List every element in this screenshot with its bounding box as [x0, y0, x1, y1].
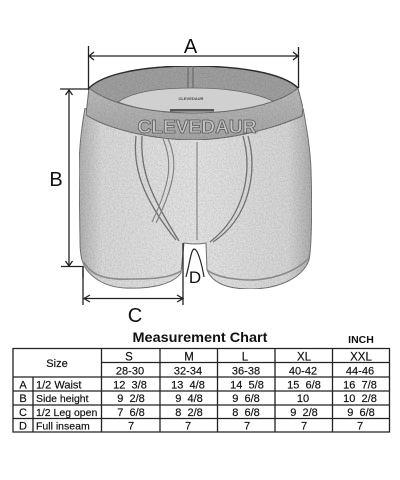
row C: 8 6/8 [232, 407, 260, 419]
fly seam [152, 139, 197, 240]
illustration: boxer briefs [79, 66, 312, 289]
row B: 10 2/8 [343, 393, 377, 405]
dimension C [83, 243, 183, 327]
row D: 7 [244, 420, 250, 432]
table grid [13, 348, 390, 432]
row A: A [19, 380, 27, 392]
row D [19, 420, 363, 432]
row D: 7 [185, 420, 191, 432]
row A: 12 3/8 [113, 380, 147, 392]
row D: 7 [357, 420, 363, 432]
row C: C [19, 407, 27, 419]
row B: 10 [297, 393, 309, 405]
dimension B: B [49, 169, 63, 191]
dimension B [49, 89, 89, 278]
size letters row: M [184, 352, 194, 364]
garment body [79, 108, 312, 289]
size letters row: L [242, 352, 249, 364]
row C: 7 6/8 [117, 407, 145, 419]
dimension D: D [189, 268, 201, 287]
row C: 1/2 Leg open [36, 407, 97, 419]
row D: D [19, 420, 27, 432]
inner label area [118, 88, 275, 113]
row A: 16 7/8 [343, 380, 377, 392]
waist range row: 32-34 [174, 366, 202, 378]
size letters row [125, 352, 372, 364]
row C [19, 407, 375, 419]
row B: 9 4/8 [175, 393, 203, 405]
row C: 8 2/8 [175, 407, 203, 419]
waist range row: 40-42 [289, 366, 317, 378]
size letters row: S [125, 352, 133, 364]
row A: 1/2 Waist [36, 380, 81, 392]
leg hems [84, 258, 309, 280]
size letters row: XXL [350, 352, 372, 364]
waistband front [86, 88, 303, 140]
waist range row: 44-46 [346, 366, 374, 378]
dimension D [186, 249, 204, 287]
row C: 9 2/8 [290, 407, 318, 419]
pouch seams [135, 136, 252, 242]
waist range row: 36-38 [232, 366, 260, 378]
back seam [188, 66, 193, 88]
row A: 14 5/8 [230, 380, 264, 392]
row B: B [19, 393, 27, 405]
row A [19, 380, 377, 392]
row C: 9 6/8 [347, 407, 375, 419]
row D: 7 [301, 420, 307, 432]
unit label: INCH [348, 334, 374, 346]
dimension A [88, 36, 298, 90]
row B: 9 2/8 [117, 393, 145, 405]
row B: 9 6/8 [232, 393, 260, 405]
row B: Side height [36, 393, 89, 405]
row A: 15 6/8 [287, 380, 321, 392]
size letters row: XL [297, 352, 312, 364]
size label [170, 96, 214, 112]
row B [19, 393, 377, 405]
dimension A: A [184, 36, 198, 58]
row D: 7 [128, 420, 134, 432]
dimension C: C [128, 305, 142, 327]
row A: 13 4/8 [171, 380, 205, 392]
waistband inner back [89, 66, 298, 106]
measurement table [13, 348, 390, 432]
size label: CLEVEDAUR [179, 96, 204, 101]
brand text: CLEVEDAUR [138, 117, 256, 137]
waist range row: 28-30 [116, 366, 144, 378]
waist range row [116, 366, 374, 378]
row D: Full inseam [36, 420, 90, 432]
chart title: Measurement Chart [132, 330, 268, 345]
size header: Size [46, 358, 68, 370]
